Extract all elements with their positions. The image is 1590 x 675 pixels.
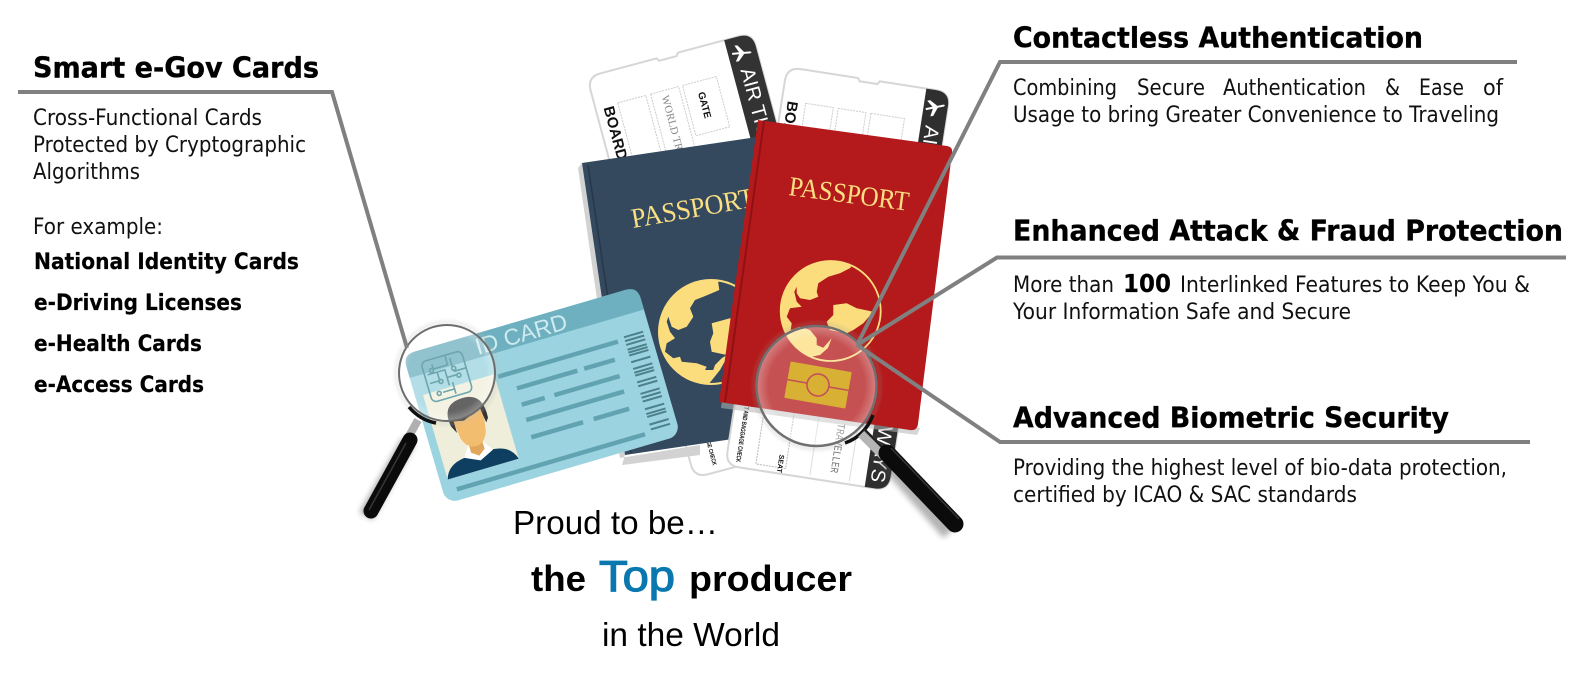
card examples: e-Access Cards (34, 372, 204, 398)
panel: Smart e-Gov Cards (33, 52, 319, 398)
PASSPORT label blue: PASSPORT (629, 183, 757, 235)
illustration: boarding pass right: AIR (916, 124, 943, 160)
tagline: Proud to be… (513, 504, 718, 541)
description: For example: (33, 214, 163, 240)
panel: Enhanced Attack & Fraud Protection (1012, 214, 1563, 325)
photo (423, 374, 519, 479)
card lines (430, 342, 645, 489)
barcode (624, 332, 670, 429)
card examples: e-Driving Licenses (34, 290, 242, 316)
illustration: boarding pass right: BOARDING (771, 100, 801, 183)
illustration: ID card: ID CARD (472, 308, 570, 360)
description: of (1483, 75, 1504, 101)
description (1013, 75, 1504, 128)
illustration: boarding pass right (725, 67, 950, 490)
description: Algorithms (33, 159, 140, 185)
magnifier left (366, 322, 498, 516)
description: Your Information Safe and Secure (1012, 299, 1351, 325)
description: Protected by Cryptographic (33, 132, 306, 158)
tagline: in the World (602, 616, 780, 653)
tagline: the (531, 558, 586, 599)
illustration: boarding pass right: TRAVELLER (826, 422, 846, 474)
illustration: boarding pass left: AIR TICKETS (736, 66, 789, 190)
description (33, 105, 306, 240)
illustration: boarding pass left (587, 33, 860, 478)
illustration: boarding pass right: T AND BAGGAGE CHECK (734, 406, 750, 463)
illustration: boarding pass left: BOARDING (600, 104, 637, 188)
card examples (34, 249, 299, 398)
card examples: National Identity Cards (34, 249, 299, 275)
card examples: e-Health Cards (34, 331, 202, 357)
gold chip (784, 361, 852, 409)
illustration: red passport (719, 120, 952, 435)
heading: Contactless Authentication (1013, 22, 1423, 54)
description (1012, 269, 1530, 325)
description: Usage to bring Greater Convenience to Traveling (1013, 102, 1499, 128)
description: More than (1013, 272, 1114, 298)
panel: Contactless Authentication (1013, 22, 1504, 128)
illustration: blue passport (578, 137, 756, 465)
leader lines (18, 62, 1566, 442)
description: certified by ICAO & SAC standards (1013, 482, 1357, 508)
description: 100 (1123, 269, 1171, 298)
description: Ease (1419, 75, 1464, 101)
description: Cross-Functional Cards (33, 105, 262, 131)
tagline: Top (599, 552, 675, 601)
chip icon (421, 351, 473, 403)
PASSPORT label red: PASSPORT (787, 170, 911, 217)
heading: Advanced Biometric Security (1013, 402, 1449, 434)
description: Interlinked Features to Keep You & (1180, 272, 1530, 298)
illustration: ID card (403, 287, 681, 504)
description (1013, 455, 1507, 508)
description: Authentication (1223, 75, 1366, 101)
globe on red passport (780, 260, 882, 362)
magnifier right (754, 323, 959, 532)
heading: Enhanced Attack & Fraud Protection (1013, 214, 1563, 248)
heading: Smart e-Gov Cards (33, 52, 319, 84)
illustration: boarding pass right: WAYS (866, 425, 896, 484)
description: Secure (1137, 75, 1205, 101)
panel: Advanced Biometric Security (1013, 402, 1507, 508)
illustration: boarding pass left: GAGE CHECK (703, 434, 717, 467)
illustration: boarding pass left: GATE (695, 91, 713, 120)
description: Providing the highest level of bio-data protection, (1013, 455, 1507, 481)
tagline (513, 504, 852, 653)
description: & (1385, 75, 1400, 101)
illustration: boarding pass left: WORLD TRAVEL (659, 94, 692, 179)
tagline: producer (689, 558, 852, 599)
globe on blue passport (658, 279, 736, 385)
description: Combining (1013, 75, 1117, 101)
illustration: boarding pass right: SEAT (775, 454, 785, 474)
